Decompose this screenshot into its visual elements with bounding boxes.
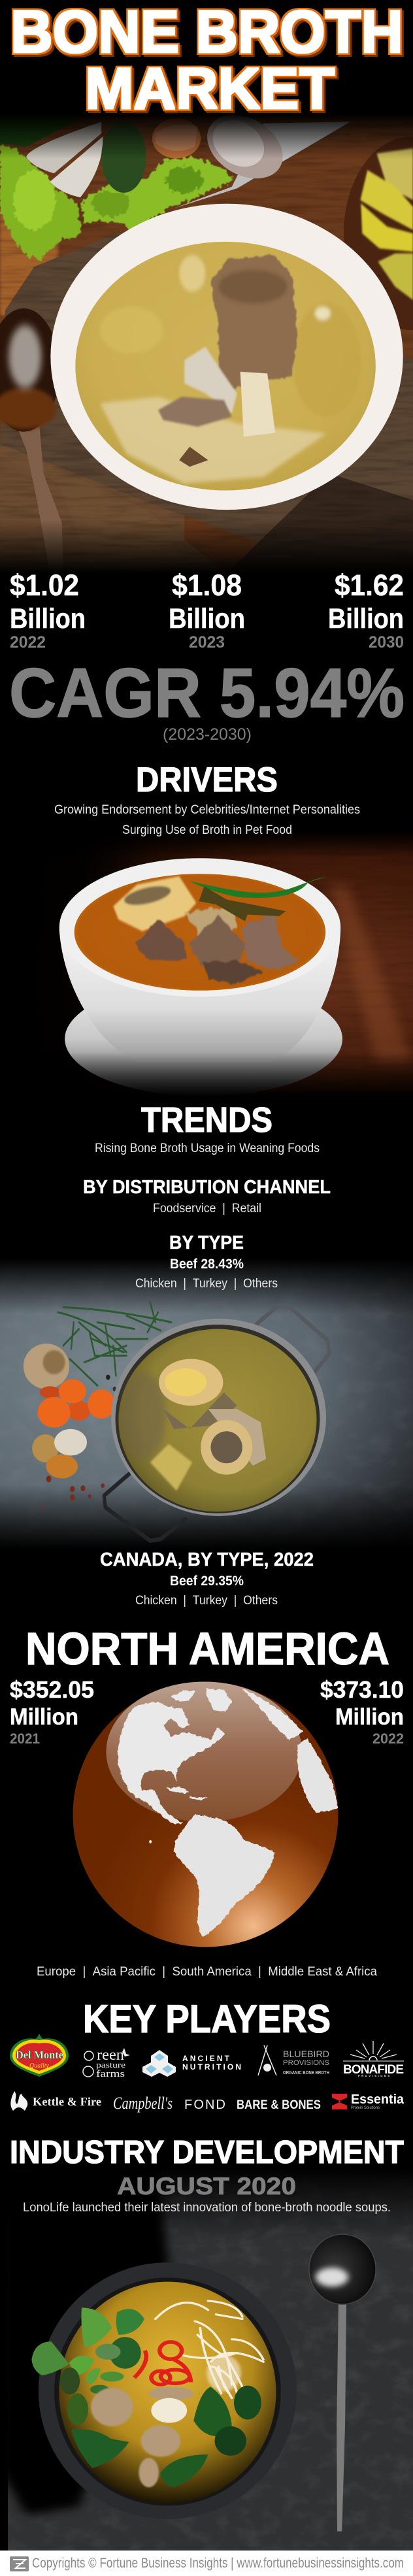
curry broth [74,874,325,991]
Arctic islands [171,1689,232,1711]
logo: Essentia: Essentia [351,2092,405,2107]
stat: North America 2022: $373.10 [320,1676,404,1703]
driver list: Surging Use of Broth in Pet Food [122,823,292,837]
icon: Fortune Business Insights logo [10,2556,29,2571]
logo: Bluebird Provisions: BLUEBIRD [283,2049,329,2059]
logo: Bluebird Provisions: ORGANIC BONE BROTH [283,2071,329,2075]
other types: Chicken | Turkey | Others [135,1277,278,1291]
development date: AUGUST 2020 [117,2173,296,2200]
yellow fruit wedges [360,148,413,300]
heading: Canada by type: CANADA, BY TYPE, 2022 [100,1549,314,1570]
logo: Bluebird Provisions: PROVISIONS [283,2059,329,2067]
leaf [199,886,286,921]
lower marrow bone [201,1409,266,1475]
white radish slices [26,122,101,173]
logo: Bonafide Provisions: PROVISIONS [358,2074,389,2077]
stat: 2023 market size: 2023 [189,633,225,652]
South America landmass [174,1815,274,1937]
bowl [50,204,403,510]
apple slice [152,118,201,158]
peppercorns [41,1375,116,1509]
pork pieces [91,2386,193,2487]
logo: Essentia [332,2092,405,2110]
onion half [201,103,289,190]
stat: 2023 market size: $1.08 [172,569,242,602]
upper marrow bone [159,1359,237,1429]
chili slices [135,2342,191,2385]
photo: curry bone broth bowl [0,831,413,1098]
heading: trends: TRENDS [141,1100,273,1140]
garlic clove [151,2398,187,2423]
heading: by distribution channel: BY DISTRIBUTION CHANNEL [83,1177,331,1198]
stat: 2023 market size [169,569,245,652]
stat: 2022 market size: 2022 [10,633,46,652]
title: BONE BROTH [10,0,403,65]
wooden spoon [0,308,63,573]
logo: Green Pasture Farms: farms [96,2069,125,2079]
photo: noodle soup on dark stone [0,2168,413,2552]
stat: 2030 market size: $1.62 [335,569,404,602]
spoon [309,2234,376,2532]
logo: Del Monte: Quality [29,2062,50,2070]
stat: 2023 market size: Billion [169,603,245,635]
logo: Bonafide Provisions: BONAFIDE [343,2063,404,2077]
logo: Green Pasture Farms [83,2047,130,2079]
Canada beef share: Beef 29.35% [170,1574,244,1589]
mint leaves [71,2386,261,2487]
lamb shank meat [210,255,298,390]
stat: North America 2021 [10,1676,94,1747]
logo: Ancient Nutrition [142,2050,241,2077]
avocado [101,121,146,193]
stat: North America 2021: Million [10,1704,78,1730]
stat: 2030 market size: Billion [328,603,404,635]
carrots [38,1379,115,1428]
stat: North America 2021: 2021 [10,1730,40,1747]
onions [32,1429,87,1478]
serving plate [174,122,350,208]
logo: Ancient Nutrition: ANCIENT [182,2054,230,2063]
stat: 2030 market size: 2030 [369,633,404,652]
heading: North America: NORTH AMERICA [25,1623,389,1674]
logo: Del Monte [10,2034,69,2077]
stat: 2030 market size [328,569,404,652]
logo: Essentia: Protein Solutions [351,2106,380,2110]
bowl body [59,929,340,1062]
footer [0,2551,413,2576]
rosemary [58,1302,171,1385]
marrow bone [113,876,196,931]
potato [150,1444,192,1491]
logo: Kettle and Fire [10,2091,101,2111]
cutting board [0,232,413,574]
green chili [190,877,327,898]
Caribbean islands [166,1787,208,1800]
bowl [39,2262,297,2519]
development text: LonoLife launched their latest innovation of bone-broth noodle soups. [23,2201,391,2215]
bowl rim [59,858,340,997]
stat: 2022 market size [10,569,86,652]
lettuce [0,146,235,260]
heading: drivers: DRIVERS [136,761,278,799]
photo: broth pot on concrete [0,1259,413,1549]
dark cloth [0,2168,169,2515]
logo: Bluebird Provisions [258,2045,329,2075]
logo: Bonafide Provisions [343,2041,404,2077]
meat chunks [135,906,301,985]
driver list [54,803,360,837]
beef share by type: Beef 28.43% [170,1257,244,1272]
pot [111,1319,326,1516]
logo: Ancient Nutrition: NUTRITION [182,2062,241,2072]
trend text: Rising Bone Broth Usage in Weaning Foods [95,1142,320,1155]
noodles [156,2301,263,2398]
bone [240,372,275,437]
logo: Bare Bones: BARE & BONES [237,2098,321,2112]
Europe and Africa [297,1738,338,1813]
title: MARKET [85,56,335,121]
Canada other types: Chicken | Turkey | Others [135,1594,278,1608]
garlic [24,1344,69,1389]
stat: North America 2022 [320,1676,404,1747]
logo: Del Monte: Del Monte [16,2049,63,2061]
heading: key players: KEY PLAYERS [83,1997,331,2041]
saucer [65,982,342,1097]
logo: Fond: FOND [184,2098,225,2112]
stat: North America 2021: $352.05 [10,1676,94,1703]
Greenland and Iceland [242,1689,303,1740]
stat: 2022 market size: $1.02 [10,569,79,602]
globe [73,1681,339,1947]
stat: 2022 market size: Billion [10,603,86,635]
driver list: Growing Endorsement by Celebrities/Internet Personalities [54,803,360,817]
heading: industry development: INDUSTRY DEVELOPMENT [10,2135,404,2170]
North America landmass [118,1702,225,1825]
title [10,0,403,121]
logo: Campbell's: Campbell's [113,2094,173,2113]
logo: Green Pasture Farms: reen [97,2047,124,2064]
golden broth [59,2282,276,2503]
pot handles [104,1306,329,1541]
herbs [31,2307,144,2425]
stat: North America 2022: Million [335,1704,404,1730]
wooden plate on the right [344,137,413,330]
heading: by type: BY TYPE [169,1232,244,1253]
other regions: Europe | Asia Pacific | South America | Middle East & Africa [37,1965,377,1979]
golden broth [118,1329,317,1511]
panel: hero photo of bone broth bowl [0,103,413,574]
CAGR period: (2023-2030) [163,725,252,744]
logo: Green Pasture Farms: pasture [96,2060,125,2070]
stat: North America 2022: 2022 [372,1730,404,1747]
logo: Kettle and Fire: Kettle & Fire [33,2095,101,2108]
distribution channels: Foodservice | Retail [153,1202,261,1215]
